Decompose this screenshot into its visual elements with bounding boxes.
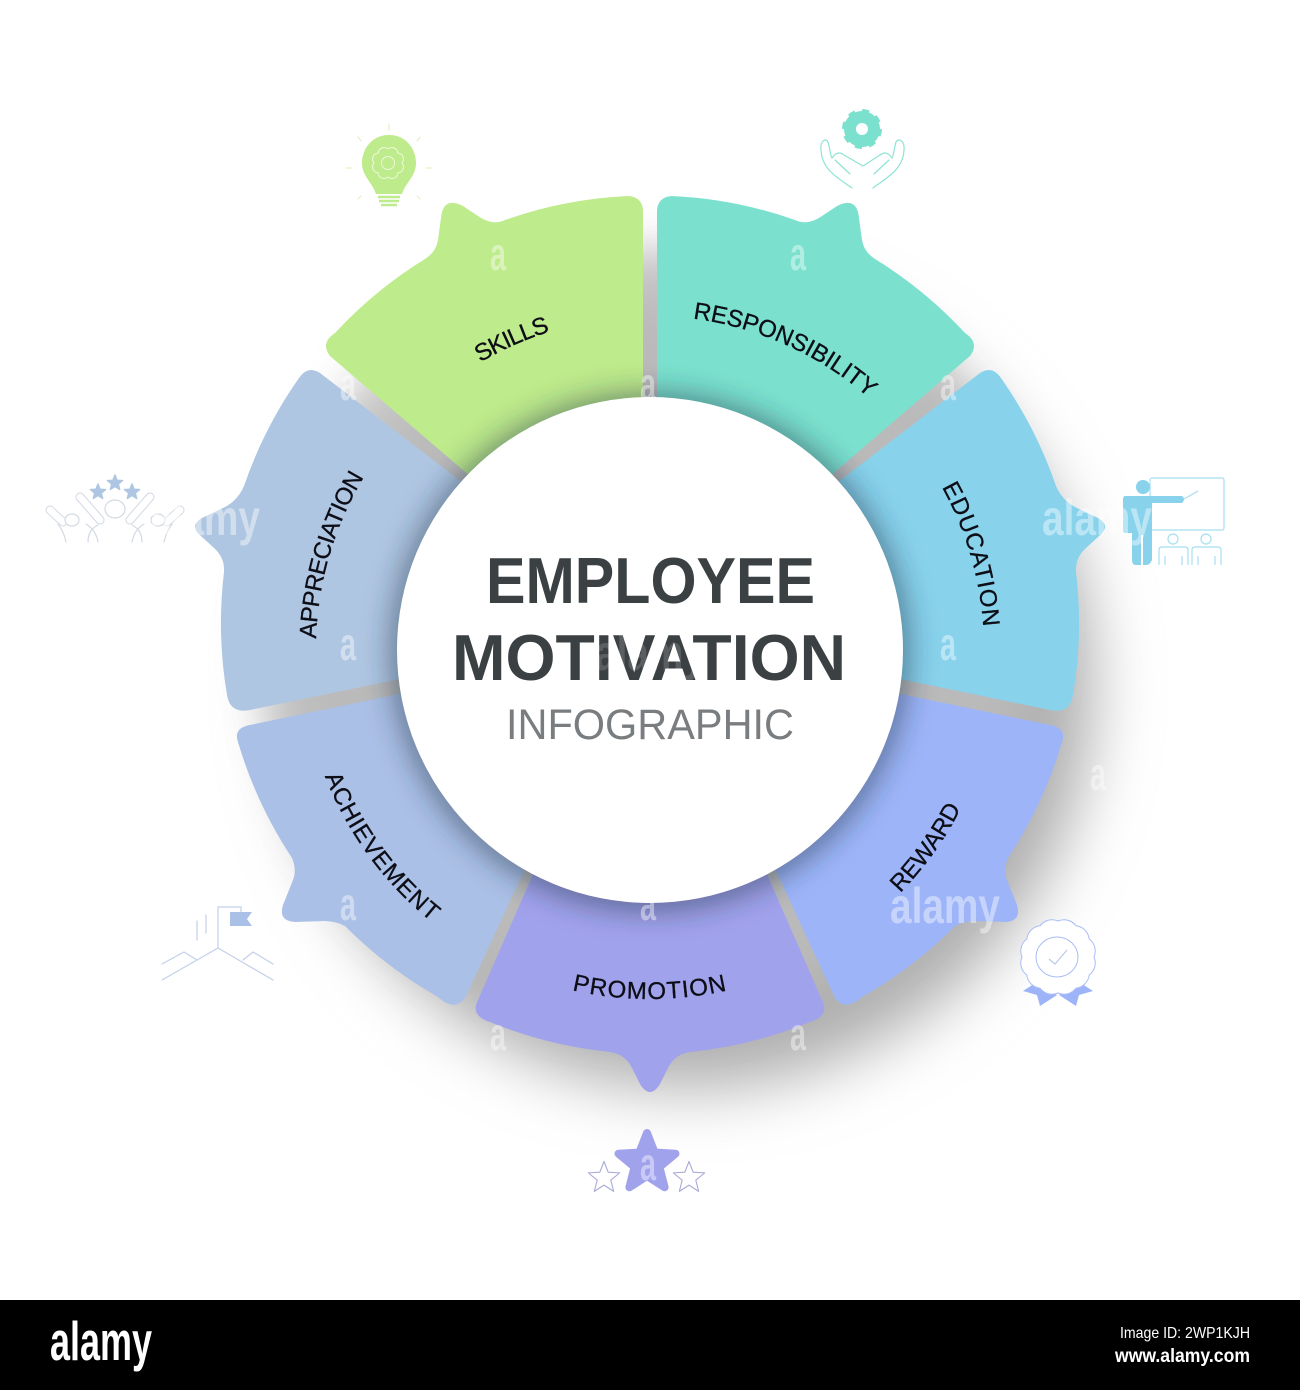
watermark marks [150, 228, 1152, 1190]
icon: mountain with flag [162, 907, 273, 980]
watermark: small a marks: a [1090, 748, 1106, 800]
watermark: small a marks: a [640, 1138, 656, 1190]
subtitle: infographic: INFOGRAPHIC [506, 701, 794, 749]
icon: cheering people with stars [50, 475, 180, 542]
icon: teacher at board with students [1123, 478, 1224, 565]
segment: skills [326, 196, 643, 519]
motivation wheel segments [195, 196, 1105, 1092]
watermark: small a marks [340, 228, 1106, 1190]
label: achievement: ACHIEVEMENT [324, 776, 442, 918]
label: skills: SKILLS [475, 317, 548, 360]
footer image id: Image ID: 2WP1KJH [1120, 1325, 1250, 1342]
wheel drop shadow [283, 279, 1093, 1089]
watermark: alamy center: alamy [595, 625, 705, 681]
label: education: EDUCATION [942, 480, 1000, 625]
watermark: large alamy lower right: alamy [890, 878, 1000, 934]
watermark: small a marks: a [490, 1008, 506, 1060]
icon: hands holding gear [821, 112, 904, 188]
title line: motivation: MOTIVATION [452, 621, 846, 694]
label: appreciation: APPRECIATION [300, 470, 364, 639]
watermark: small a marks: a [940, 618, 956, 670]
title line: employee: EMPLOYEE [486, 544, 815, 617]
watermark: small a marks: a [340, 618, 356, 670]
segment: achievement [237, 673, 565, 1005]
segment: responsibility [657, 196, 974, 519]
watermark: alamy right: alamy [1042, 490, 1152, 546]
watermark: small a marks: a [790, 1008, 806, 1060]
watermark: small a marks: a [490, 228, 506, 280]
icon: light bulb with gear [346, 124, 432, 205]
center title [452, 544, 846, 749]
center circle [397, 397, 903, 903]
segment: promotion [476, 760, 824, 1092]
watermark: small a marks: a [340, 358, 356, 410]
label: reward: REWARD [889, 804, 958, 892]
watermark: small a marks: a [940, 358, 956, 410]
watermark: alamy left: alamy [150, 490, 260, 546]
center circle shadow [388, 390, 912, 914]
segment: appreciation [195, 370, 540, 711]
segment: education [760, 370, 1105, 711]
label: responsibility: RESPONSIBILITY [694, 302, 880, 394]
segment: reward [735, 673, 1063, 1005]
footer bar [0, 1300, 1300, 1390]
footer logo: alamy [50, 1310, 152, 1372]
watermark: small a marks: a [640, 358, 656, 410]
gap shading under segments [265, 251, 1035, 1021]
icon: three stars [588, 1133, 705, 1191]
footer url: www.alamy.com [1114, 1346, 1250, 1367]
label: promotion: PROMOTION [574, 974, 726, 1000]
watermark: small a marks: a [640, 878, 656, 930]
watermark: small a marks: a [790, 228, 806, 280]
watermark: small a marks: a [340, 878, 356, 930]
icon: badge with ribbons [1021, 920, 1095, 1006]
segment labels [300, 302, 1000, 1000]
